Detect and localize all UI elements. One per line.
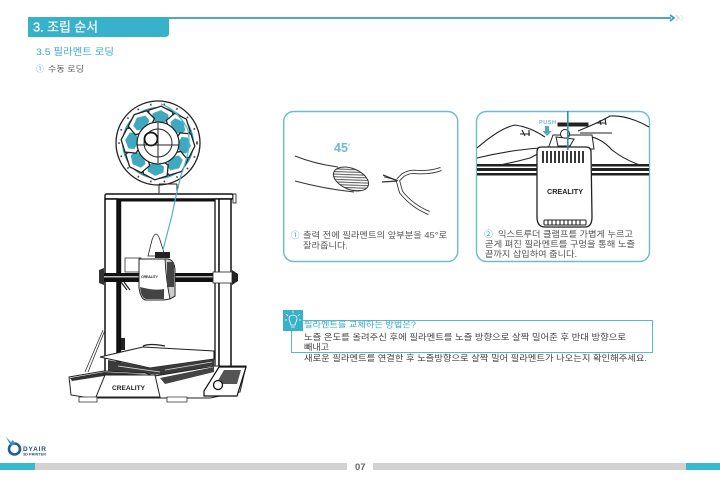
callout body: 빼내고 (304, 342, 329, 352)
control screen (204, 367, 246, 396)
base: CREALITY (112, 385, 146, 392)
icon: light bulb (283, 310, 303, 331)
callout body: 노즐 온도를 올려주신 후에 필라멘트를 노즐 방향으로 살짝 밀어준 후 반대 방향으로 (304, 332, 626, 342)
caption (291, 230, 447, 250)
caption: ② (484, 229, 493, 239)
page number: 07 (355, 462, 366, 473)
extruder block: CREALITY (547, 189, 583, 196)
caption: 익스트루더 클램프를 가볍게 누르고 (498, 228, 633, 239)
filament tip (295, 156, 372, 196)
sub heading: 수동 로딩 (48, 64, 84, 74)
icon: header chevrons (670, 15, 683, 21)
extruder block (537, 147, 592, 227)
spool holder (159, 184, 177, 193)
sub heading: ① (36, 64, 44, 74)
gantry (99, 268, 238, 290)
footer bar (0, 462, 720, 473)
section heading: 3.5 필라멘트 로딩 (36, 46, 114, 58)
callout heading: 필라멘트를 교체하는 방법은? (304, 320, 416, 330)
caption: ① (291, 230, 300, 240)
icon: pliers (382, 169, 441, 213)
panel: insert filament (476, 111, 650, 262)
filament path (161, 104, 189, 250)
logo (6, 437, 46, 456)
extruder (125, 234, 175, 300)
caption: 잘라줍니다. (303, 240, 348, 250)
header banner (28, 17, 671, 37)
logo: 3D PRINTER (23, 452, 46, 456)
logo: DYAIR (23, 446, 46, 453)
callout: filament replacement (283, 310, 652, 363)
angle label: 45 (334, 141, 348, 155)
push label: PUSH (539, 120, 556, 126)
callout body (304, 332, 647, 363)
sub heading (36, 64, 84, 74)
clamp (548, 123, 594, 149)
angle label: ° (348, 144, 351, 150)
caption: 출력 전에 필라멘트의 앞부분을 45°로 (303, 230, 447, 240)
caption (484, 228, 635, 259)
title: 3. 조립 순서 (33, 20, 98, 34)
hands and rails (477, 116, 649, 165)
bed (85, 330, 214, 382)
extruder: CREALITY (141, 275, 158, 279)
filament (567, 111, 569, 150)
caption: 끝까지 삽입하여 줍니다. (485, 248, 577, 259)
caption: 곧게 펴진 필라멘트를 구멍을 통해 노즐 (485, 238, 635, 249)
base (69, 366, 246, 402)
icon: push arrow (542, 126, 552, 136)
callout body: 새로운 필라멘트를 연결한 후 노즐방향으로 살짝 밀어 필라멘트가 나오는지 확인해주세요. (304, 353, 647, 363)
printer illustration (69, 101, 246, 402)
frame (105, 194, 236, 376)
panel: cut filament (284, 112, 458, 262)
spool (116, 101, 200, 185)
